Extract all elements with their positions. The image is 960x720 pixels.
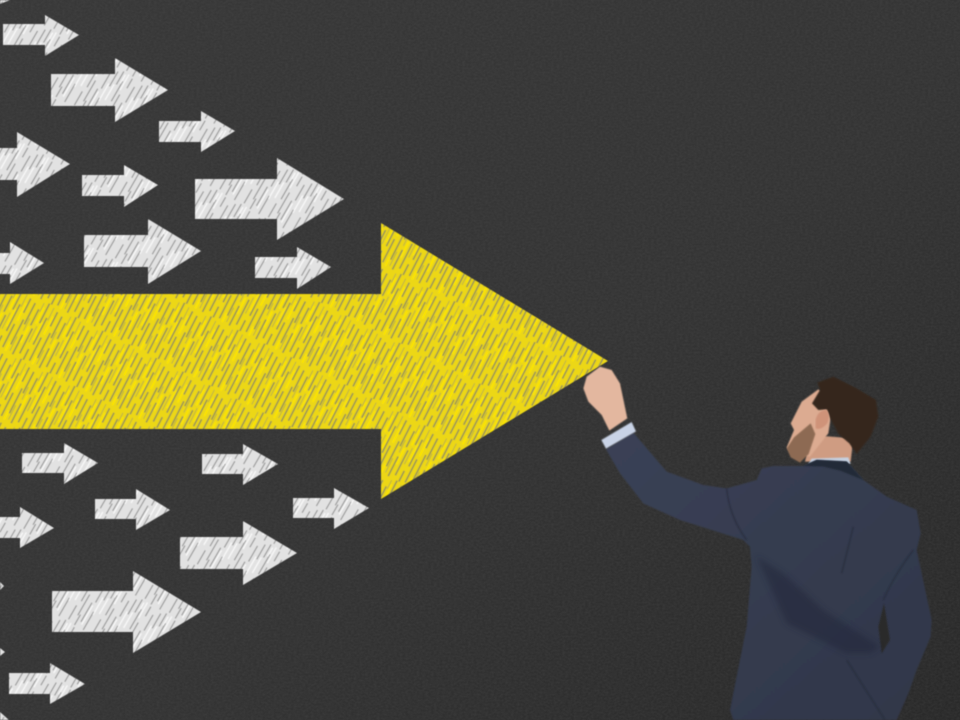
arrow: largest upper bbox=[195, 158, 344, 240]
arrow: lower largest bbox=[52, 571, 201, 653]
hair bbox=[812, 377, 878, 454]
arrow: left edge large bbox=[0, 132, 70, 197]
arrow: left edge small bbox=[0, 242, 44, 284]
arrow: bottom corner fragment bbox=[0, 712, 9, 720]
arrow: left fragment one bbox=[0, 582, 4, 590]
arrow: middle small bbox=[82, 165, 158, 207]
seams bbox=[727, 488, 913, 720]
hand bbox=[583, 367, 627, 431]
arrow: above shaft left bbox=[84, 219, 201, 284]
arrow: lower medium bbox=[180, 521, 297, 585]
arrow: lower left edge bbox=[0, 507, 54, 548]
arrow: lower row 1 left bbox=[22, 443, 98, 484]
jacket with raised arm bbox=[606, 433, 932, 720]
arrow: upper row 1 bbox=[3, 15, 79, 56]
ear bbox=[816, 410, 829, 429]
arrow: left fragment two bbox=[0, 648, 5, 656]
beard bbox=[787, 423, 815, 463]
white arrows above the yellow arrow bbox=[0, 0, 344, 289]
arrow: bottom bbox=[9, 663, 85, 704]
arrow: lower row 2 bbox=[95, 489, 170, 530]
gap between arm and back bbox=[878, 603, 890, 653]
jacket collar bbox=[803, 460, 863, 480]
arrow: above shaft right bbox=[255, 247, 331, 289]
arrow: upper row 3 bbox=[159, 111, 235, 152]
neck bbox=[805, 435, 853, 462]
businessman seen from behind bbox=[583, 367, 932, 720]
arrow: corner fragment bbox=[0, 0, 10, 4]
arrow: lower row 2 right bbox=[293, 488, 369, 529]
white arrows below the yellow arrow bbox=[0, 443, 369, 720]
shirt collar bbox=[808, 457, 851, 464]
large yellow arrow bbox=[0, 223, 608, 499]
arrow: lower row 1 right bbox=[202, 444, 278, 485]
jacket shadow folds bbox=[757, 557, 880, 653]
arrow: upper row 2 large bbox=[51, 58, 168, 122]
face bbox=[787, 389, 833, 457]
shirt cuff bbox=[601, 422, 636, 449]
